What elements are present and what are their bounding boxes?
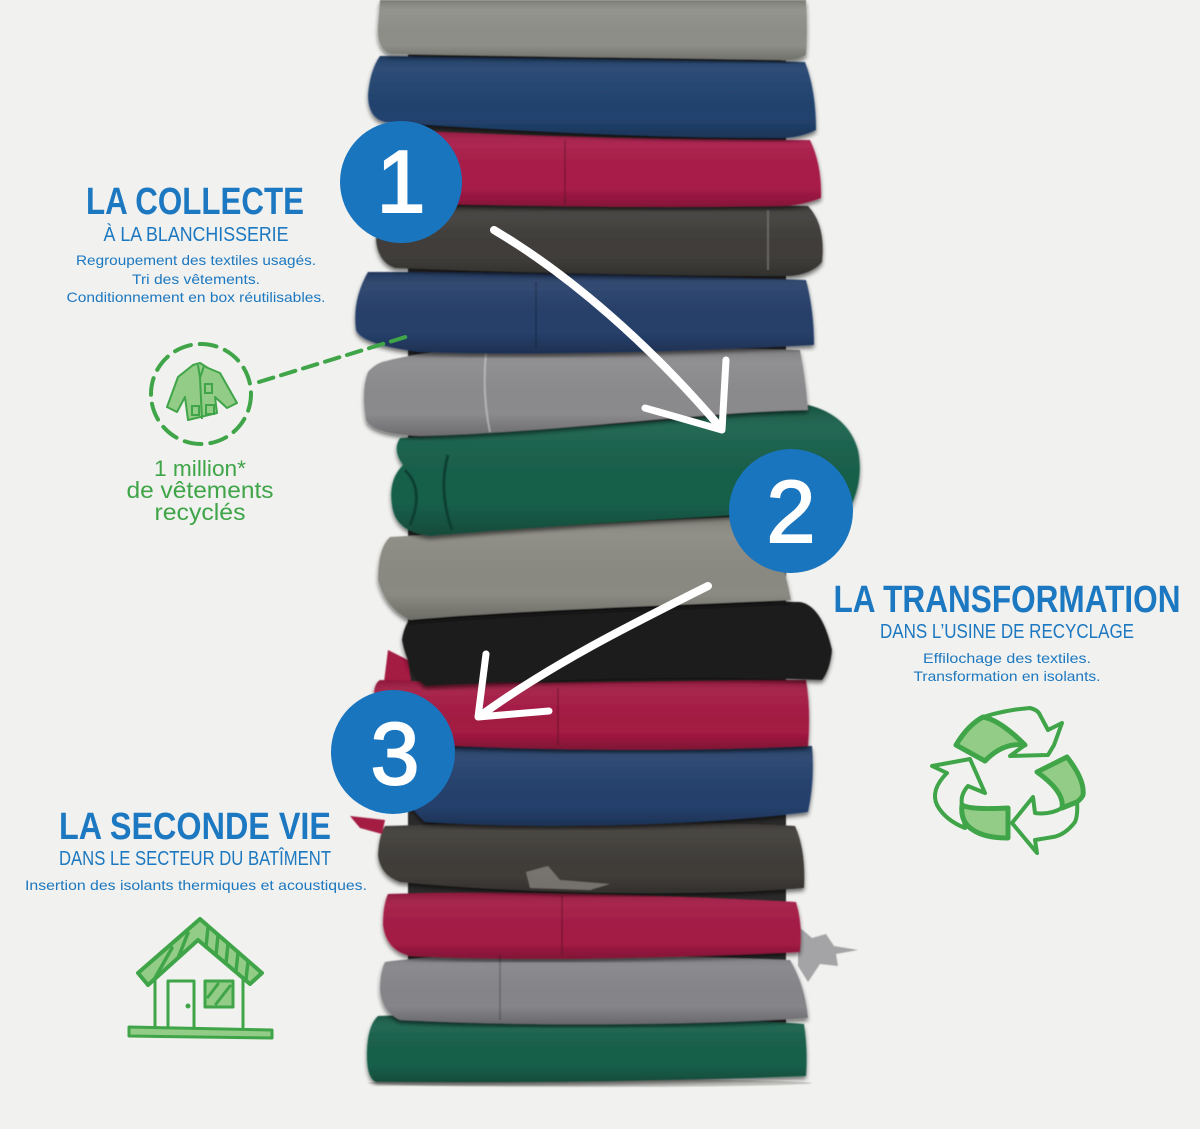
tan grey layer	[378, 516, 791, 620]
black layer	[402, 602, 832, 686]
stack of folded work clothes	[350, 0, 860, 1087]
arrow from step 2 to step 3	[478, 586, 708, 717]
number badge 2: 2	[767, 462, 815, 561]
stat: 1 million de vêtements recyclés	[126, 456, 274, 525]
stat: 1 million de vêtements recyclés: recyclés	[154, 499, 246, 525]
text block: la transformation: Effilochage des textiles.	[923, 650, 1091, 666]
number badge 3: 3	[371, 704, 419, 803]
frayed fabric	[798, 926, 858, 982]
green bottom layer	[367, 1014, 807, 1082]
green layer	[391, 405, 860, 536]
icon: recycling symbol	[932, 708, 1083, 853]
number badge 3	[331, 690, 455, 814]
text block: la transformation: DANS L’USINE DE RECYCLAGE	[880, 621, 1134, 643]
grey layer	[380, 953, 808, 1024]
grey layer upper	[364, 347, 808, 436]
text block: la seconde vie: DANS LE SECTEUR DU BATÎMENT	[59, 847, 331, 870]
text block: la collecte: Tri des vêtements.	[132, 271, 260, 287]
text block: la seconde vie: Insertion des isolants thermiques et acoustiques.	[25, 877, 367, 893]
stat: 1 million de vêtements recyclés: de vêtements	[126, 477, 274, 503]
red layer upper	[400, 130, 821, 207]
text block: la transformation: Transformation en isolants.	[914, 668, 1100, 684]
number badge 1: 1	[377, 132, 425, 231]
blue layer	[368, 56, 816, 138]
text block: la collecte: À LA BLANCHISSERIE	[104, 223, 288, 246]
icon: house	[129, 919, 272, 1038]
arrow from step 1 to step 2	[494, 230, 726, 430]
text block: la collecte: LA COLLECTE	[86, 181, 304, 223]
text block: la collecte: Conditionnement en box réutilisables.	[66, 289, 326, 305]
red flap	[350, 816, 385, 834]
text block: la collecte: Regroupement des textiles usagés.	[76, 252, 316, 268]
number badge 1	[340, 121, 462, 243]
top grey layer	[378, 0, 807, 60]
text block: la seconde vie: LA SECONDE VIE	[59, 806, 331, 848]
red layer	[383, 893, 801, 959]
text block: la collecte	[66, 181, 326, 305]
dark grey layer	[378, 822, 804, 893]
navy layer	[400, 746, 813, 826]
stat: 1 million de vêtements recyclés: 1 million*	[154, 456, 246, 481]
navy layer upper	[355, 272, 814, 354]
red layer middle	[384, 650, 412, 690]
text block: la seconde vie	[25, 806, 367, 893]
dark grey layer upper	[376, 205, 823, 276]
text block: la transformation	[834, 579, 1180, 684]
number badge 2	[729, 449, 853, 573]
dashed callout line	[259, 335, 412, 382]
icon: jacket in dashed circle	[151, 344, 251, 444]
